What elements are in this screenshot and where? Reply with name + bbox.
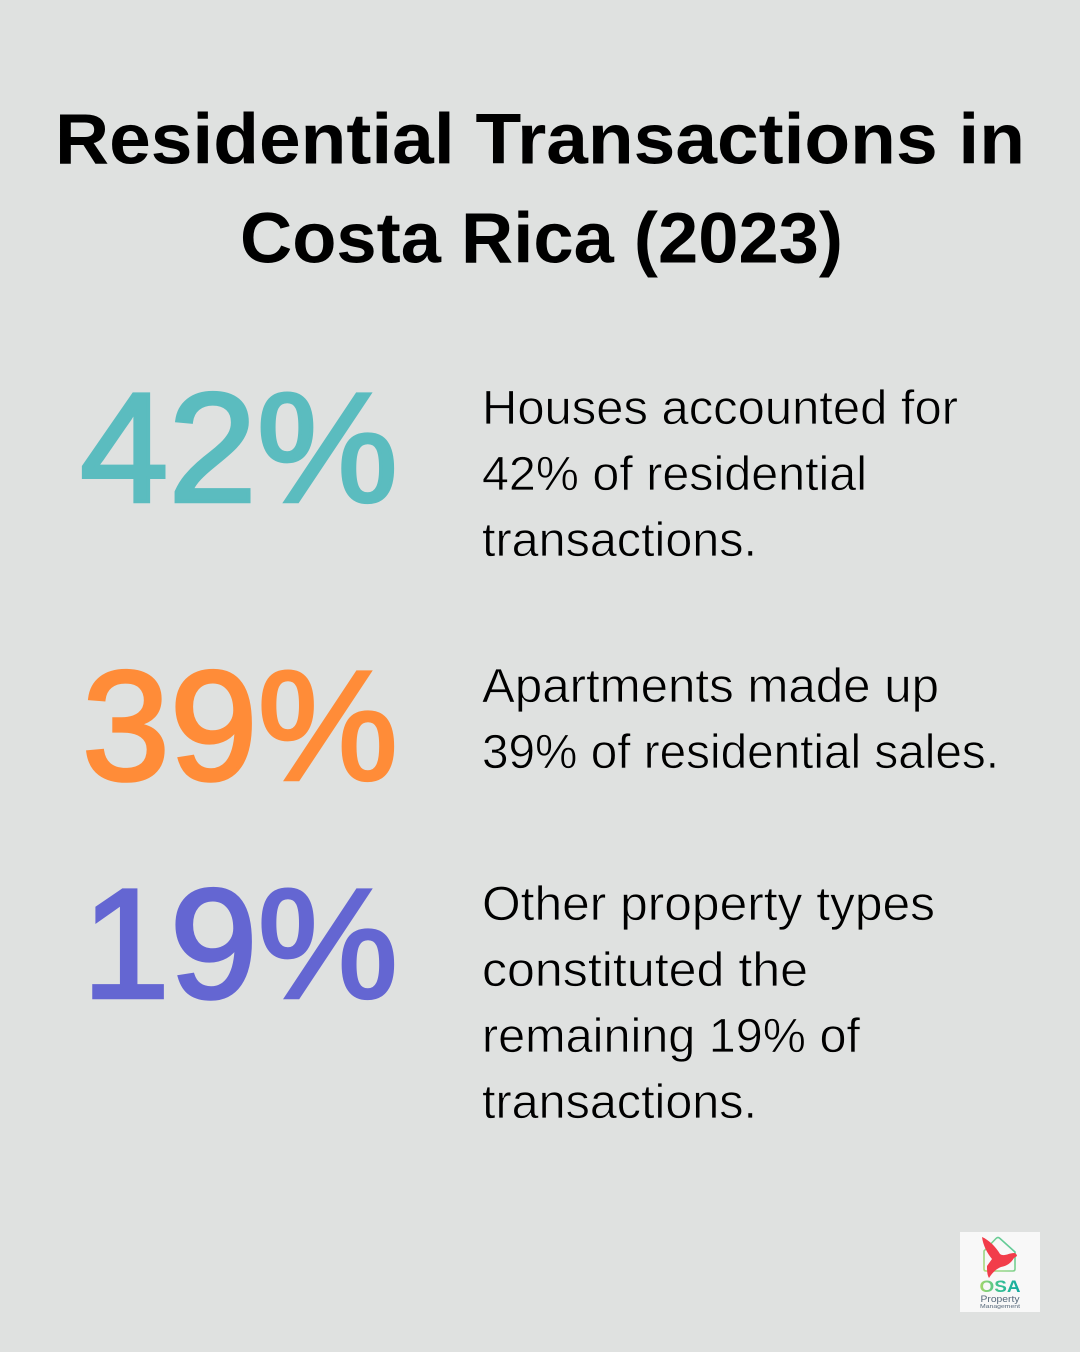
text: other description: Other property types	[482, 877, 935, 931]
number: 39%: 39%	[82, 640, 398, 814]
text: apartments description: Apartments made up	[482, 659, 939, 713]
text: other description: transactions.	[482, 1075, 757, 1129]
title: Residential Transactions in	[55, 100, 1025, 180]
text: other description: constituted the	[482, 943, 808, 997]
number: 19%: 19%	[82, 858, 398, 1032]
stat: other 19%	[82, 858, 935, 1129]
text: houses description: Houses accounted for	[482, 381, 958, 435]
text: apartments description	[482, 659, 999, 779]
logo: OSA Property Management	[960, 1232, 1040, 1312]
text: other description: remaining 19% of	[482, 1009, 861, 1063]
stat: apartments 39%	[82, 640, 999, 814]
wordmark: Property: Property	[980, 1294, 1020, 1305]
number: 42%: 42%	[80, 362, 398, 536]
text: houses description: 42% of residential	[482, 447, 867, 501]
text: houses description	[482, 381, 958, 567]
text: apartments description: 39% of residential sales.	[482, 725, 999, 779]
wordmark: Management: Management	[980, 1304, 1021, 1310]
title: Costa Rica (2023)	[240, 200, 843, 278]
title	[55, 100, 1025, 278]
icon: house outline	[984, 1238, 1015, 1271]
icon: red bird	[982, 1237, 1017, 1278]
wordmark: OSA: OSA	[980, 1278, 1021, 1296]
text: other description	[482, 877, 935, 1129]
stat: houses 42%	[80, 362, 958, 567]
text: houses description: transactions.	[482, 513, 757, 567]
